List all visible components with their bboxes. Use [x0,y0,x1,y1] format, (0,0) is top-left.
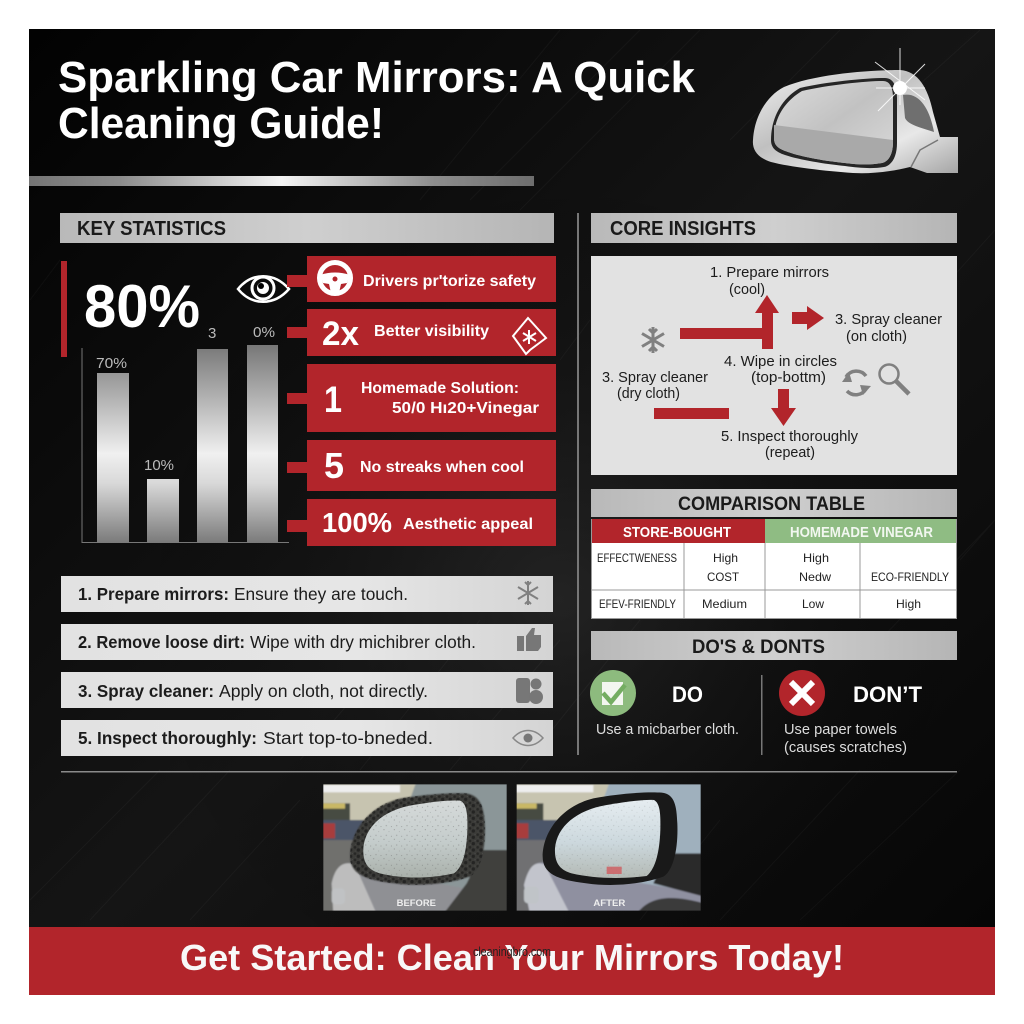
table: High [713,551,738,565]
step 2 [61,624,553,660]
step: spray cleaner on cloth: (on cloth) [846,328,907,345]
step: spray cleaner dry cloth: (dry cloth) [617,385,680,402]
heading: core insights [591,213,957,243]
stat: no streaks: No streaks when cool [360,459,524,476]
step: prepare mirrors: (cool) [729,281,765,298]
watermark: cleaningbro.com [473,944,551,959]
step 3 [61,672,553,708]
don't text: (causes scratches) [784,739,907,756]
don't text [784,721,907,756]
bar chart: 3 [208,325,216,342]
step 1: Ensure they are touch. [234,584,408,604]
don't heading: DON’T [853,682,923,707]
bar chart: 70% [96,355,127,372]
arrow: up [680,295,779,349]
stat: homemade solution: 50/0 Hı20+Vinegar [392,400,539,417]
red connector bar [654,408,729,419]
step: spray cleaner dry cloth: 3. Spray cleaner [602,369,708,386]
label: after: AFTER [593,898,626,908]
stat: aesthetic appeal: 100% [322,507,392,538]
accent bar [61,261,67,357]
bar chart: 10% [144,457,174,474]
stat: 2x better visibility: Better visibility [374,323,489,340]
icon: eye [238,276,289,302]
table: ECO-FRIENDLY [871,570,949,584]
column divider [577,213,579,755]
step: wipe in circles [724,353,837,386]
title: Cleaning Guide! [58,99,384,148]
bar chart: 0% [253,324,275,341]
banner: call to action: Get Started: Clean Your Mirrors Today! [180,937,844,978]
title: Sparkling Car Mirrors: A Quick [58,53,696,102]
stat: homemade solution: 1 [324,379,342,420]
title [58,53,696,148]
icon: red cross [779,670,825,716]
stat: homemade solution [287,364,556,432]
step 2: Wipe with dry michibrer cloth. [250,632,476,652]
icon: magnifier [880,364,909,394]
stat: 2x better visibility [287,309,556,356]
table: EFFECTWENESS [597,551,677,565]
step 3: Apply on cloth, not directly. [219,681,428,701]
step 5: Start top-to-bneded. [263,728,433,748]
heading: do's and don'ts: DO'S & DONTS [692,637,825,658]
step 3: 3. Spray cleaner: [78,681,214,701]
big stat 80%: 80% [84,273,200,340]
stat: aesthetic appeal: Aesthetic appeal [403,516,533,533]
don't text: Use paper towels [784,721,897,738]
table: HOMEMADE VINEGAR [790,525,933,541]
panel: comparison table [591,489,957,619]
photos: before and after [320,781,704,914]
step: wipe in circles: 4. Wipe in circles [724,353,837,370]
panel: step list [61,576,553,756]
stat: homemade solution: Homemade Solution: [361,380,519,397]
step: inspect thoroughly: (repeat) [765,444,815,461]
step: inspect thoroughly [721,428,858,461]
stat: aesthetic appeal [287,499,556,546]
icon: snowflake [642,327,664,353]
table: Medium [702,597,747,611]
step 5 [61,720,553,756]
heading: comparison table: COMPARISON TABLE [678,494,865,515]
step: spray cleaner on cloth: 3. Spray cleaner [835,311,942,328]
table: High [896,597,921,611]
label: before: BEFORE [397,898,436,908]
stat: drivers prioritize safety: Drivers pr'torize safety [363,273,536,290]
photo: before [320,781,510,914]
do heading: DO [672,682,703,707]
heading: key statistics [60,213,554,243]
flow diagram background [591,256,957,475]
icon: chrome car mirror [753,48,958,173]
heading: key statistics: KEY STATISTICS [77,218,226,240]
table: High [803,551,829,565]
table: EFEV-FRIENDLY [599,597,676,611]
step: inspect thoroughly: 5. Inspect thoroughly [721,428,858,445]
step 1 [61,576,553,612]
stat: 2x better visibility: 2x [322,315,359,353]
decorative metal rule [29,176,534,186]
table [591,519,957,619]
step 2: 2. Remove loose dirt: [78,632,245,652]
step: prepare mirrors: 1. Prepare mirrors [710,264,829,281]
panel: core insights [591,213,957,475]
step 5: 5. Inspect thoroughly: [78,728,257,748]
divider [761,675,762,755]
bar chart [82,324,289,543]
table: STORE-BOUGHT [623,525,731,541]
do text: Use a micbarber cloth. [596,721,739,738]
table: Low [802,597,824,611]
arrow: right [792,306,824,330]
heading: core insights: CORE INSIGHTS [610,218,756,240]
icon: green check [590,670,636,716]
arrow: down [771,389,796,426]
stat: drivers prioritize safety [287,256,556,302]
step 1: 1. Prepare mirrors: [78,584,229,604]
photo: after [513,781,704,914]
step: spray cleaner dry cloth [602,369,708,402]
table: COST [707,570,740,584]
stat: no streaks [287,440,556,491]
panel: key statistics [60,213,556,546]
divider rule [61,771,957,772]
stat: no streaks: 5 [324,445,344,486]
table: Nedw [799,570,831,584]
heading: comparison table [591,489,957,517]
step: wipe in circles: (top-bottm) [751,369,826,386]
panel: do's and don'ts [590,631,957,756]
icon: refresh [842,371,871,395]
step: prepare mirrors [710,264,829,298]
step: spray cleaner on cloth [835,311,942,345]
banner: call to action [29,927,995,995]
heading: do's and don'ts [591,631,957,660]
